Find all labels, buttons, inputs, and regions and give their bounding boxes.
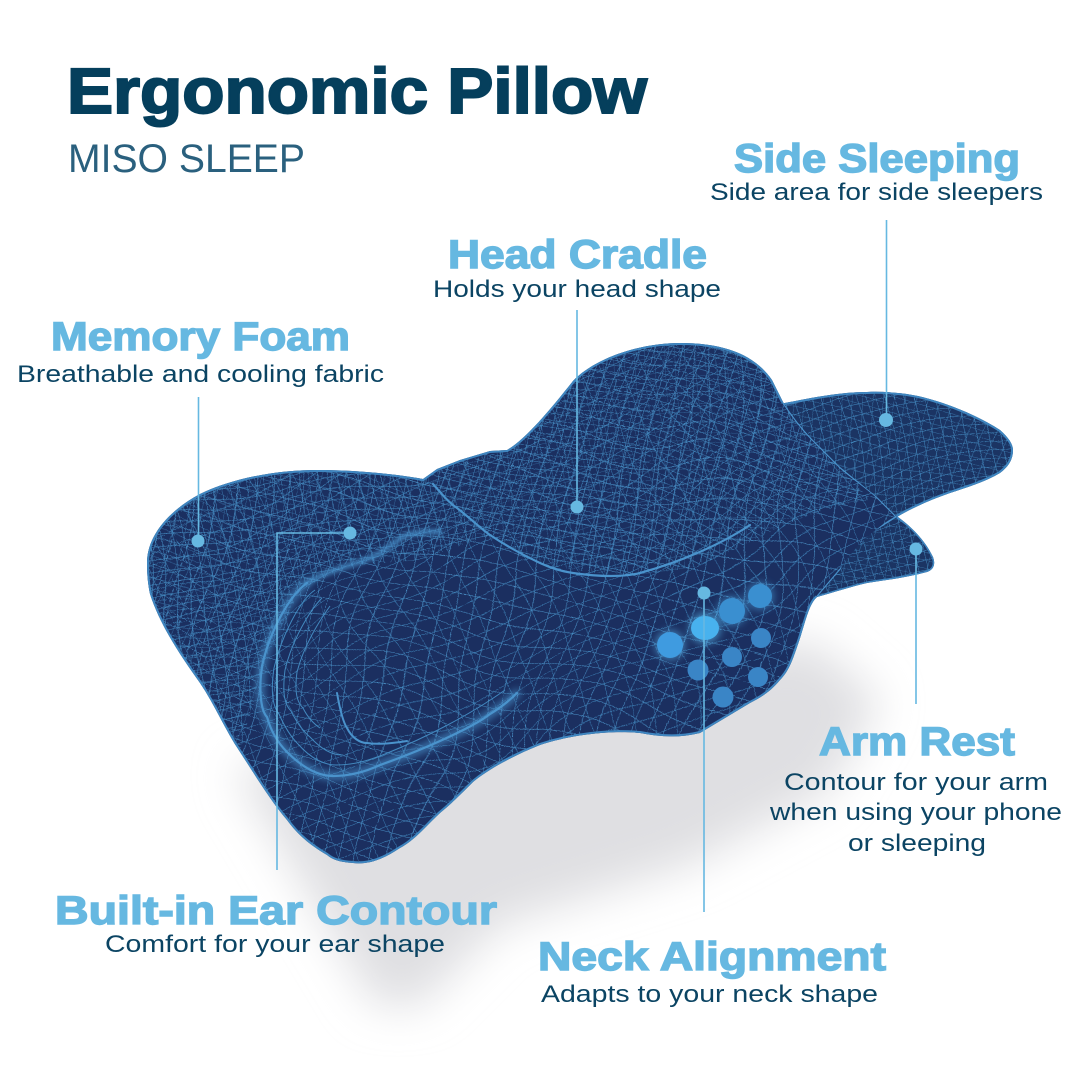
callout: arm rest: or sleeping xyxy=(848,830,986,857)
head cradle dense mesh xyxy=(425,344,868,574)
callout: side sleeping: Side Sleeping xyxy=(734,137,1020,181)
callout: built-in ear contour: Built-in Ear Contour xyxy=(55,889,497,933)
callout: head cradle xyxy=(433,233,721,514)
ridge lines xyxy=(260,402,897,776)
title xyxy=(67,55,647,181)
callout: built-in ear contour: Comfort for your ear shape xyxy=(105,931,445,958)
ear contour mesh rings xyxy=(272,590,505,765)
callout: built-in ear contour xyxy=(55,526,497,958)
callout: head cradle: Head Cradle xyxy=(448,233,707,277)
neck ventilation dots xyxy=(655,582,774,708)
callout: side sleeping xyxy=(710,137,1043,427)
callout: side sleeping: Side area for side sleepers xyxy=(710,179,1043,206)
title heading: Ergonomic Pillow xyxy=(67,55,647,127)
pillow illustration xyxy=(147,343,1013,864)
pillow arm rest xyxy=(817,516,934,597)
callout: arm rest: when using your phone xyxy=(769,799,1062,826)
callout: neck alignment: Neck Alignment xyxy=(538,935,886,979)
callout: arm rest: Arm Rest xyxy=(819,720,1015,764)
callout: head cradle: Holds your head shape xyxy=(433,276,721,303)
callout: arm rest xyxy=(769,542,1062,857)
callout: neck alignment: Adapts to your neck shape xyxy=(541,981,878,1008)
pillow drop shadow xyxy=(235,640,880,1005)
subtitle: MISO SLEEP xyxy=(68,137,305,181)
callout: arm rest: Contour for your arm xyxy=(784,769,1048,796)
callout: neck alignment xyxy=(538,586,886,1008)
pillow main body xyxy=(147,343,897,864)
callout: memory foam: Breathable and cooling fabric xyxy=(17,361,384,388)
pillow side wing xyxy=(784,392,1013,517)
pillow outline xyxy=(147,343,817,863)
dense left lobe mesh xyxy=(149,472,488,748)
callout: memory foam xyxy=(17,315,384,548)
callout: memory foam: Memory Foam xyxy=(51,315,350,359)
